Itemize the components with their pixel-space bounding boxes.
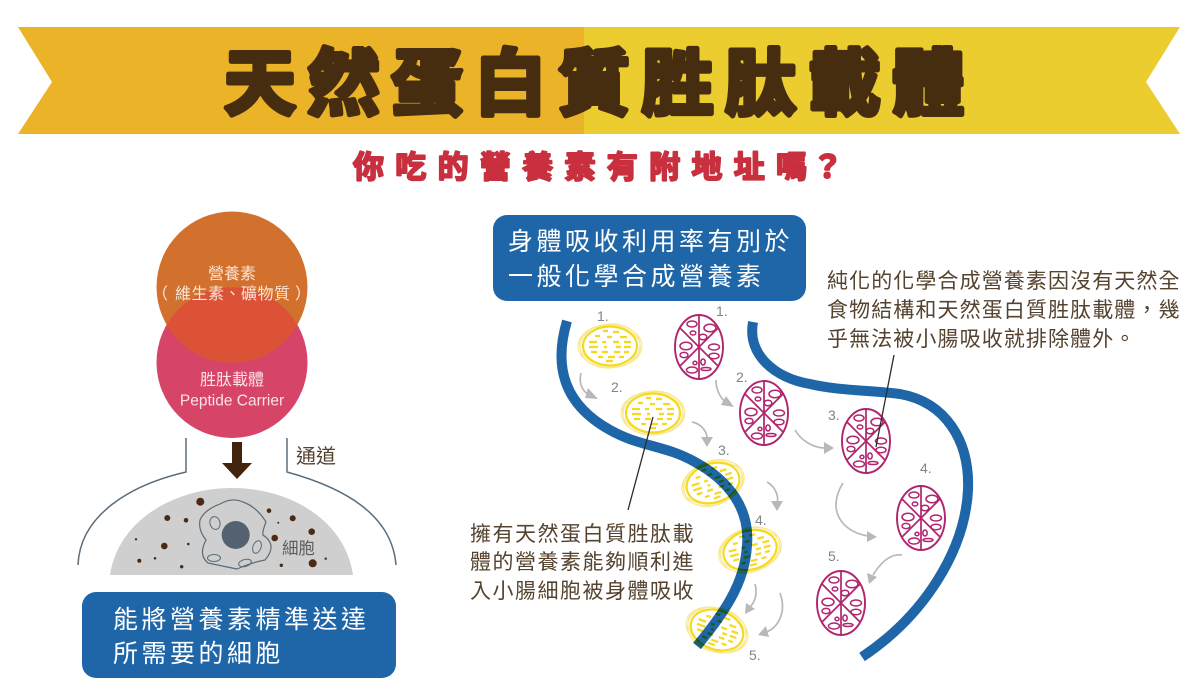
- text: natural carrier nutrients: 入小腸細胞被身體吸收: [470, 580, 695, 603]
- text: natural carrier nutrients: [470, 523, 695, 603]
- text: natural carrier nutrients: 擁有天然蛋白質胜肽載: [470, 523, 695, 546]
- step numbers: 4.: [755, 512, 767, 528]
- step numbers: 5.: [749, 647, 761, 663]
- step numbers: 1.: [597, 308, 609, 324]
- nutrient sublabel: [152, 284, 311, 303]
- step numbers: 3.: [828, 407, 840, 423]
- text: natural carrier nutrients: 體的營養素能夠順利進: [470, 551, 695, 574]
- venn circles: nutrient and carrier: [156, 212, 308, 438]
- text: synthetic nutrients: 乎無法被小腸吸收就排除體外。: [827, 328, 1136, 351]
- callout: absorption difference: 一般化學合成營養素: [508, 263, 765, 291]
- nutrient label: 營養素: [208, 265, 256, 283]
- leader lines: [628, 355, 894, 510]
- panel: peptide carrier diagram: [78, 212, 396, 575]
- arrow: into cell: [222, 442, 252, 479]
- step numbers: 1.: [716, 303, 728, 319]
- cell label: 細胞: [282, 539, 315, 558]
- text: synthetic nutrients: 食物結構和天然蛋白質胜肽載體，幾: [827, 299, 1181, 322]
- cell illustration: [200, 500, 271, 569]
- step numbers: 2.: [611, 379, 623, 395]
- callout: precise delivery: [82, 592, 396, 678]
- carrier label: 胜肽載體: [200, 371, 264, 389]
- step numbers: 2.: [736, 369, 748, 385]
- callout: absorption difference: 身體吸收利用率有別於: [508, 228, 793, 256]
- cell tissue dome: [110, 488, 353, 575]
- particles: [135, 498, 327, 568]
- intestine walls: [561, 321, 968, 657]
- step numbers: 5.: [828, 548, 840, 564]
- step numbers: [597, 303, 932, 663]
- text: synthetic nutrients: [827, 270, 1181, 351]
- callout: absorption difference: [493, 215, 806, 301]
- subtitle question mark: ？: [812, 142, 843, 187]
- title banner: [18, 27, 1180, 134]
- callout: precise delivery: 能將營養素精準送達: [113, 606, 370, 634]
- subtitle: 你吃的營養素有附地址嗎: [353, 142, 807, 187]
- grey flow arrows: [580, 373, 902, 637]
- nutrient sublabel: ）: [295, 285, 311, 303]
- step numbers: 3.: [718, 442, 730, 458]
- nutrient sublabel: 維生素、礦物質: [175, 284, 290, 303]
- purple synthetic cells: [675, 315, 945, 635]
- callout: precise delivery: 所需要的細胞: [113, 640, 284, 668]
- step numbers: 4.: [920, 460, 932, 476]
- yellow nutrient cells: [578, 321, 787, 664]
- title: 天然蛋白質胜肽載體: [224, 25, 964, 130]
- nutrient sublabel: （: [152, 285, 168, 303]
- carrier english label: Peptide Carrier: [180, 392, 284, 410]
- text: synthetic nutrients: 純化的化學合成營養素因沒有天然全: [827, 270, 1181, 293]
- channel outline: [78, 438, 396, 565]
- channel label: 通道: [296, 445, 336, 468]
